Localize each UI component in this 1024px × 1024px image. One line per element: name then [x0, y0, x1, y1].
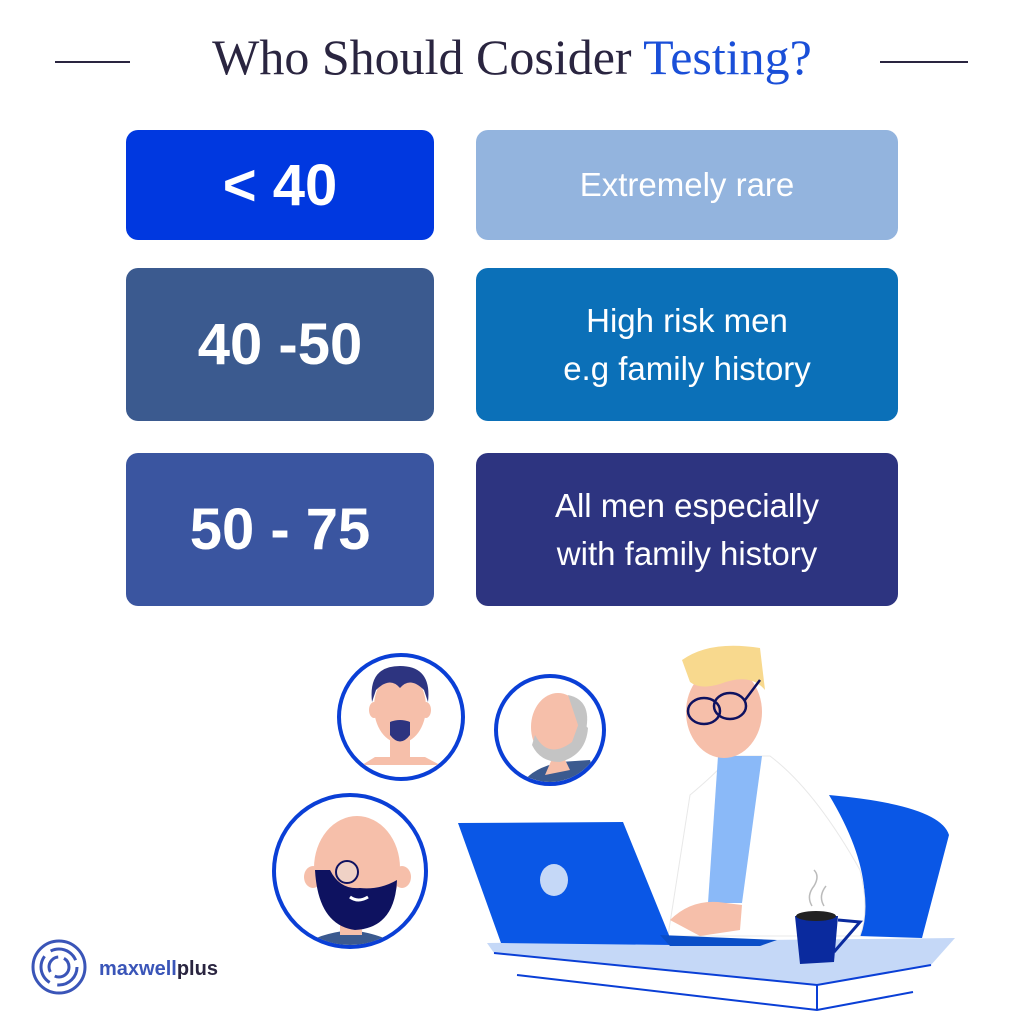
avatar: grey bearded man [496, 676, 604, 790]
laptop [458, 822, 777, 946]
logo: maxwellplus [99, 958, 218, 980]
box: extremely rare: Extremely rare [580, 166, 794, 203]
box: high risk men: High risk men [586, 302, 788, 338]
logo [33, 941, 218, 993]
box: 40-50: 40 -50 [198, 312, 362, 377]
desk [487, 938, 955, 985]
box: under 40: < 40 [223, 152, 337, 218]
box: under 40 [126, 130, 434, 240]
box: 50-75: 50 - 75 [190, 497, 370, 562]
illustration [32, 646, 955, 1011]
box: 50-75 [126, 453, 434, 606]
title line left [55, 61, 130, 63]
avatar: bald monocle man [274, 795, 426, 950]
title: Who Should Cosider Testing? [212, 29, 812, 85]
box: high risk men: e.g family history [563, 350, 811, 386]
box: all men: All men especially [555, 486, 819, 524]
avatar: goatee man [339, 655, 463, 779]
title line right [880, 61, 968, 63]
box: 40-50 [126, 268, 434, 421]
man at desk [668, 646, 865, 936]
coffee mug [795, 870, 860, 964]
box: all men: with family history [557, 534, 817, 572]
box: all men [476, 453, 898, 606]
box: extremely rare [476, 130, 898, 240]
box: high risk men [476, 268, 898, 421]
chair [829, 795, 949, 938]
